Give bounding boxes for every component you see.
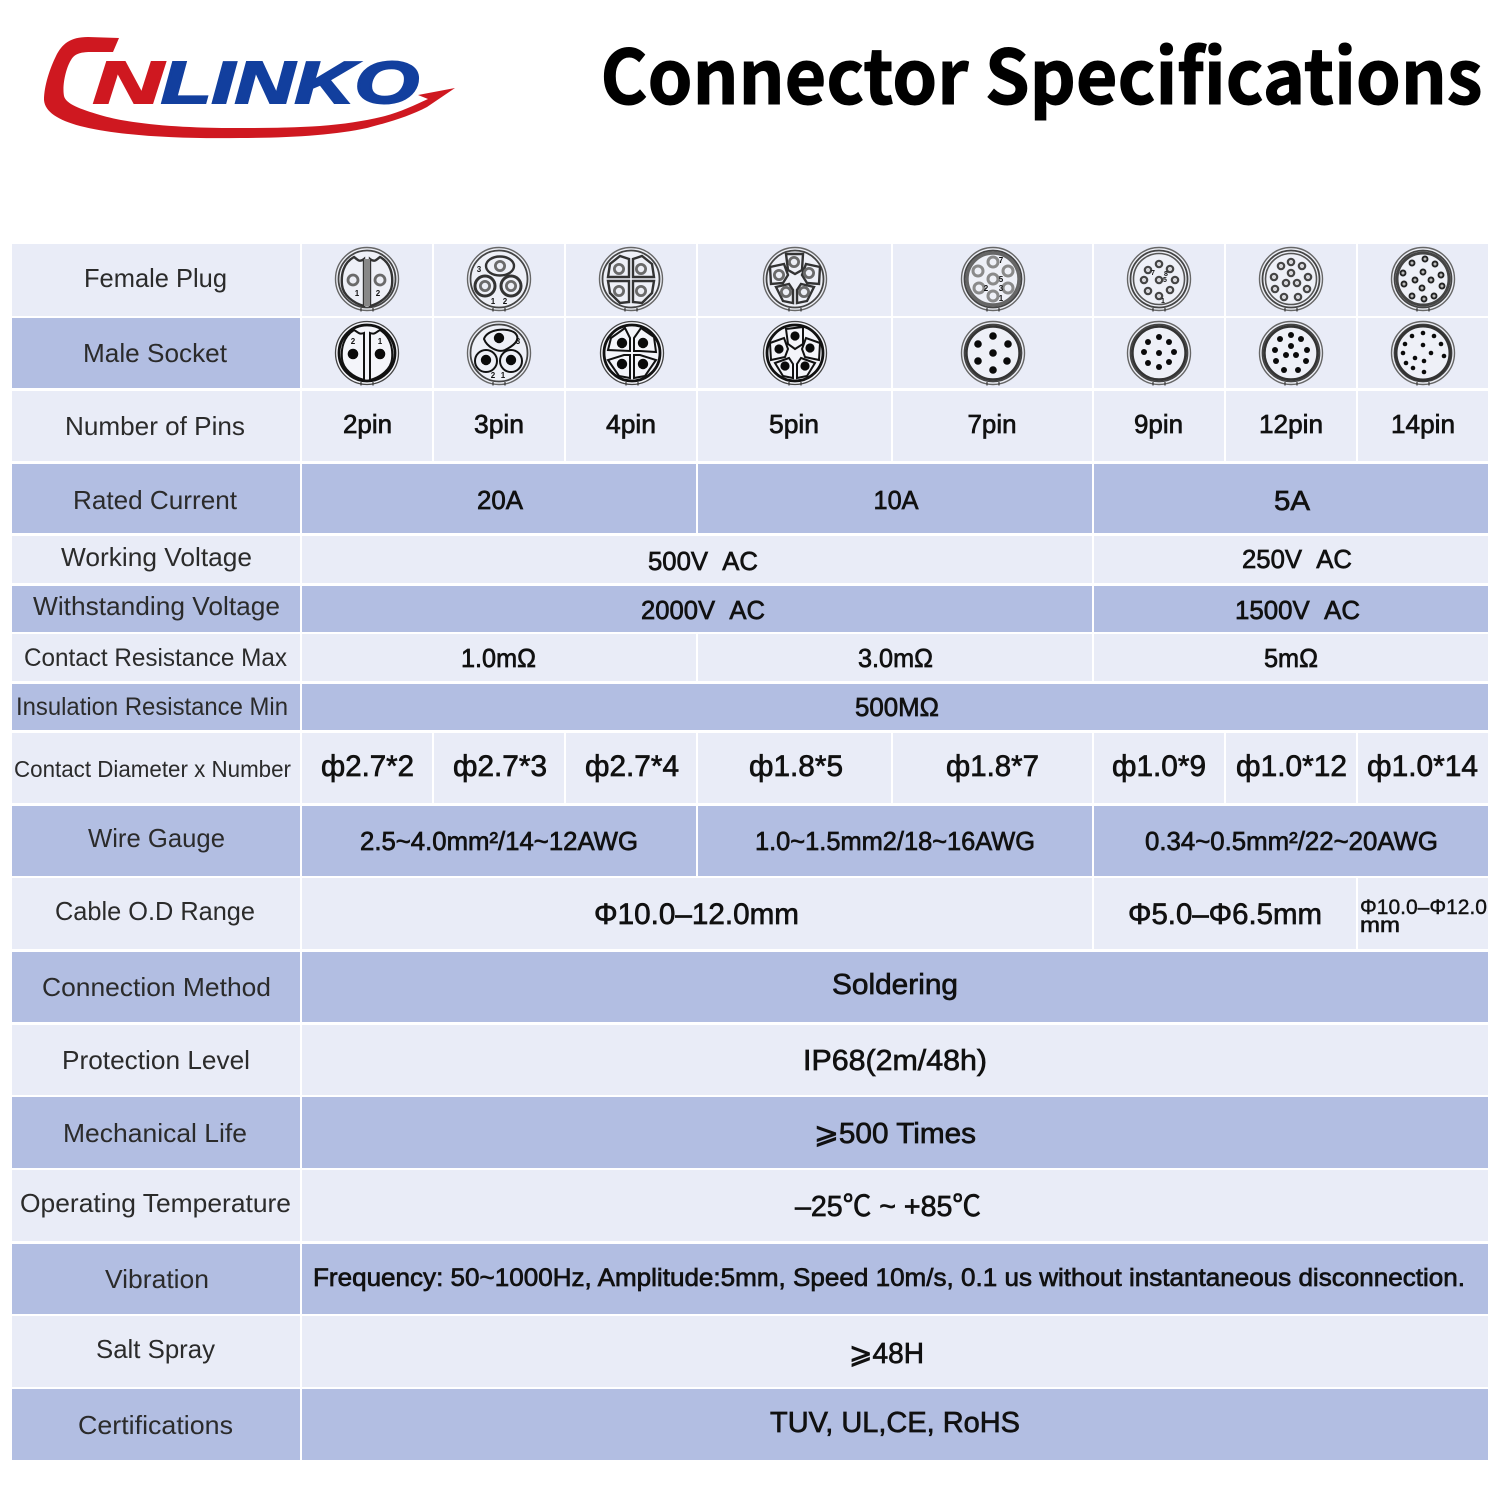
icon: female 9pin: 7 (1151, 270, 1155, 277)
label: Mechanical Life: Mechanical Life (63, 1118, 247, 1148)
label: Connection Method: Connection Method (42, 972, 271, 1002)
contact diameters: ф2.7*2 (321, 750, 414, 783)
value: 5.0-6.5mm: Φ5.0–Φ6.5mm (1128, 898, 1322, 931)
label: Protection Level: Protection Level (62, 1045, 250, 1075)
pin counts: 12pin (1259, 409, 1323, 439)
pin counts: 2pin (343, 409, 392, 439)
icon: female 2pin: 2 (376, 289, 381, 298)
icon: female 9pin: 1 (1161, 298, 1165, 305)
row: Male Socket (12, 318, 1488, 388)
icon: female 2pin (336, 248, 398, 312)
icon: female 3pin (468, 248, 530, 312)
row: Mechanical Life (12, 1097, 1488, 1168)
icon: female 7pin: 3 (999, 284, 1004, 293)
value: temperature range: –25℃ ~ +85℃ (795, 1191, 981, 1223)
label: Insulation Resistance Min: Insulation Resistance Min (16, 693, 288, 721)
label: Vibration: Vibration (105, 1264, 209, 1294)
row: Withstanding Voltage (12, 586, 1488, 632)
icon: male 4pin (600, 322, 664, 386)
row: Contact Diameter x Number (12, 733, 1488, 803)
row: Contact Resistance Max (12, 634, 1488, 681)
icon: female 4pin (600, 248, 662, 312)
value: certifications: TUV, UL,CE, RoHS (770, 1407, 1020, 1439)
contact diameters (321, 750, 1478, 783)
icon: male 3pin (468, 322, 530, 386)
icon: male 12pin (1260, 322, 1322, 386)
label: Cable O.D Range: Cable O.D Range (55, 896, 255, 926)
icon: male 5pin (764, 322, 826, 386)
pin counts (343, 409, 1455, 439)
pin counts: 9pin (1134, 409, 1183, 439)
icon: male 2pin (336, 322, 398, 386)
contact diameters: ф1.8*7 (946, 750, 1039, 783)
icon: female 7pin: 5 (999, 275, 1004, 284)
value: 500MΩ: 500MΩ (855, 692, 939, 722)
value: 10A: 10A (874, 485, 919, 515)
row: Operating Temperature (12, 1170, 1488, 1241)
row: Wire Gauge (12, 806, 1488, 876)
value: small 10.0-12.0 mm: Φ10.0–Φ12.0 (1360, 896, 1487, 919)
value: 2000V AC: 2000V AC (641, 595, 765, 625)
icon: male 2pin: 2 (351, 337, 356, 346)
value: 250V AC: 250V AC (1242, 544, 1352, 574)
logo: CNLINKO (44, 37, 455, 138)
logo letters LINKO: LINKO (161, 50, 419, 116)
label: Rated Current: Rated Current (73, 485, 238, 515)
value: 20A: 20A (477, 485, 524, 515)
contact diameters: ф1.0*12 (1236, 750, 1347, 783)
icon: female 12pin (1260, 248, 1322, 312)
label: Operating Temperature: Operating Temperature (20, 1188, 291, 1218)
value: small 10.0-12.0 mm (1360, 896, 1487, 937)
icon: female 3pin: 3 (477, 265, 482, 274)
value: 3.0mΩ: 3.0mΩ (858, 643, 933, 673)
label: Contact Resistance Max: Contact Resistance Max (24, 644, 287, 672)
icon: male 3pin: 1 (501, 371, 506, 380)
contact diameters: ф2.7*4 (585, 750, 679, 783)
value: 14~12AWG: 2.5~4.0mm²/14~12AWG (360, 826, 638, 856)
contact diameters: ф1.0*9 (1112, 750, 1206, 783)
logo swoosh (44, 37, 455, 138)
contact diameters: ф1.0*14 (1367, 750, 1478, 783)
row: Female Plug (12, 244, 1488, 316)
value: 500V AC: 500V AC (648, 546, 758, 576)
icon: male 7pin (962, 322, 1024, 386)
value: Soldering: Soldering (832, 969, 958, 1001)
label: Female Plug: Female Plug (84, 263, 227, 293)
pin counts: 4pin (606, 409, 656, 439)
pin counts: 14pin (1391, 409, 1455, 439)
icon: female 5pin (764, 248, 826, 312)
icon: female 9pin: 8 (1164, 271, 1168, 278)
label: Working Voltage: Working Voltage (61, 542, 252, 572)
row: Protection Level (12, 1025, 1488, 1095)
pin counts: 7pin (968, 409, 1016, 439)
icon: female 2pin: 1 (355, 289, 360, 298)
icon: female 7pin: 2 (984, 284, 989, 293)
icon: female 14pin (1392, 248, 1454, 312)
row: Vibration (12, 1244, 1488, 1314)
row: Connection Method (12, 952, 1488, 1022)
label: Salt Spray: Salt Spray (96, 1334, 215, 1364)
row: Certifications (12, 1389, 1488, 1460)
contact diameters: ф1.8*5 (749, 750, 843, 783)
value: 5mΩ: 5mΩ (1264, 643, 1318, 673)
label: Wire Gauge: Wire Gauge (88, 823, 225, 853)
value: 22~20AWG: 0.34~0.5mm²/22~20AWG (1145, 826, 1438, 856)
icon: male 9pin (1128, 322, 1190, 386)
icon: male 2pin: 1 (378, 337, 383, 346)
pin counts: 5pin (769, 409, 819, 439)
value: vibration spec: Frequency: 50~1000Hz, Amplitude:5mm, Speed 10m/s, 0.1 us without instantaneous disconnection. (313, 1264, 1465, 1292)
value: 5A: 5A (1274, 485, 1310, 516)
row: Rated Current (12, 464, 1488, 533)
value: 18~16AWG: 1.0~1.5mm2/18~16AWG (755, 826, 1035, 856)
row: Cable O.D Range (12, 878, 1488, 949)
row: Working Voltage (12, 536, 1488, 583)
icon: female 3pin: 2 (503, 297, 508, 306)
pin counts: 3pin (474, 409, 524, 439)
icon: female 7pin (962, 248, 1024, 312)
label: Contact Diameter x Number: Contact Diameter x Number (14, 756, 291, 782)
contact diameters: ф2.7*3 (453, 750, 547, 783)
logo letter N: N (93, 50, 165, 116)
row: Insulation Resistance Min (12, 684, 1488, 730)
icon: female 9pin: 5 (1163, 277, 1167, 284)
icon: female 9pin (1128, 248, 1190, 312)
icon: male 3pin: 2 (491, 371, 496, 380)
icon: female 7pin: 7 (999, 256, 1004, 265)
label: Male Socket: Male Socket (83, 338, 228, 368)
value: 1500V AC: 1500V AC (1235, 595, 1360, 625)
label: Number of Pins: Number of Pins (65, 411, 245, 441)
value: IP68: IP68(2m/48h) (803, 1045, 987, 1077)
value: 10.0-12.0mm: Φ10.0–12.0mm (594, 898, 799, 931)
title: Connector Specifications (600, 17, 1482, 126)
value: 1.0mΩ: 1.0mΩ (461, 643, 536, 673)
value: 500 Times: ⩾500 Times (814, 1118, 976, 1150)
icon: male 3pin: 3 (516, 337, 521, 346)
value: 48H: ⩾48H (849, 1338, 924, 1370)
icon: male 14pin (1392, 322, 1454, 386)
icon: female 3pin: 1 (491, 297, 496, 306)
icon: female 7pin: 1 (999, 294, 1004, 303)
value: small 10.0-12.0 mm: mm (1360, 914, 1400, 937)
row: Number of Pins (12, 391, 1488, 461)
label: Certifications: Certifications (78, 1410, 233, 1440)
row: Salt Spray (12, 1316, 1488, 1387)
label: Withstanding Voltage: Withstanding Voltage (33, 591, 280, 621)
